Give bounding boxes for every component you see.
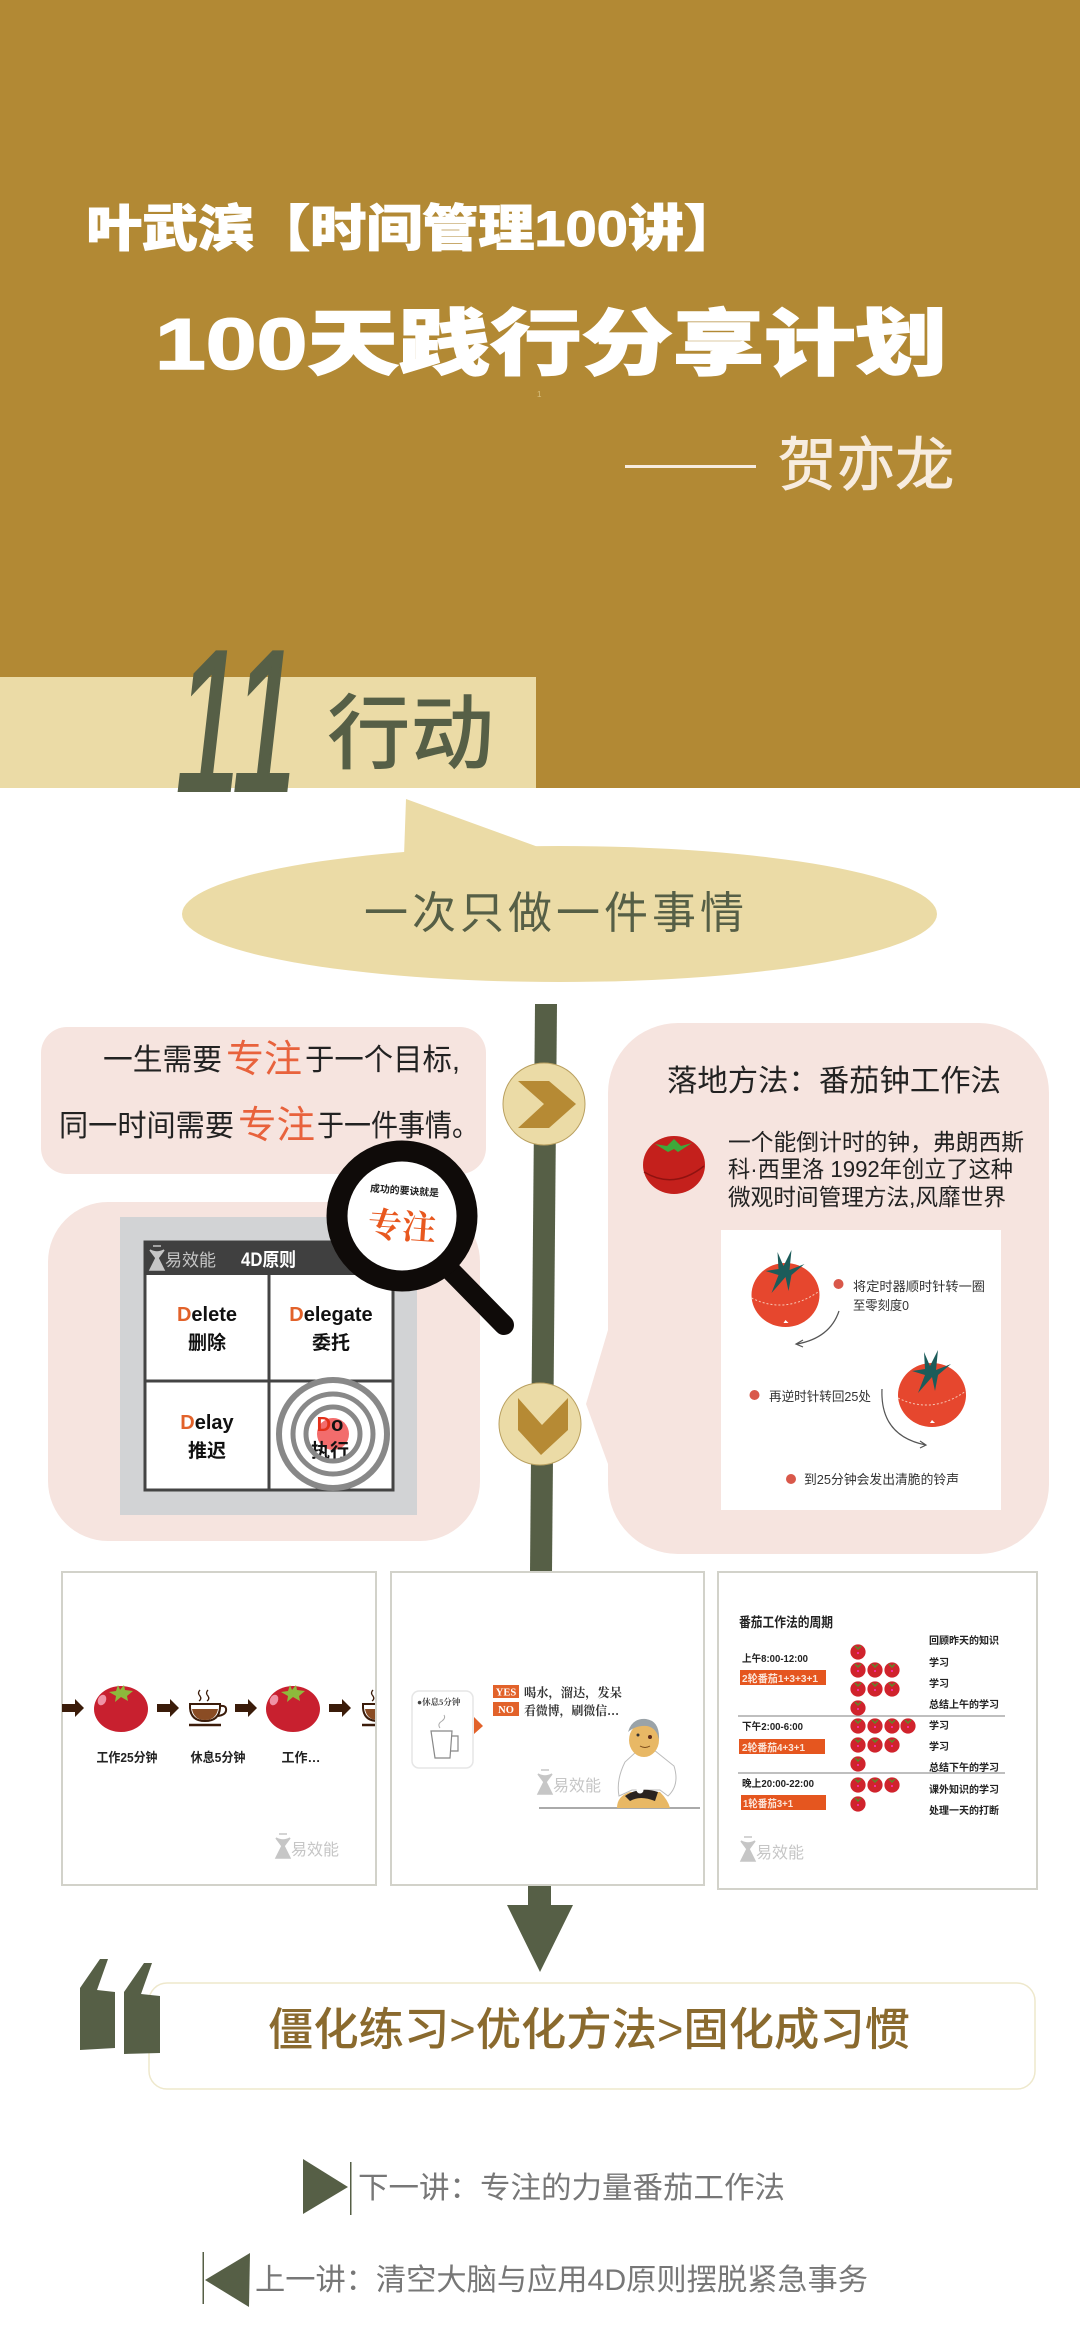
4D table: Delegate (289, 1304, 373, 1326)
previous lecture link: 上一讲：清空大脑与应用4D原则摆脱紧急事务 (255, 2264, 868, 2297)
card: what to do in a break (391, 1572, 704, 1885)
4D table: 删除 (188, 1331, 226, 1354)
card: pomodoro day schedule: 番茄工作法的周期 (739, 1614, 833, 1630)
panel: focus statement: 同一时间需要 (59, 1110, 234, 1143)
4D table: 委托 (312, 1332, 350, 1354)
card: what to do in a break: 易效能 (553, 1777, 601, 1795)
panel: pomodoro method (586, 1023, 1049, 1554)
speech bubble (182, 799, 937, 982)
card: pomodoro day schedule: 课外知识的学习 (929, 1783, 999, 1796)
icon: tomato timer (643, 1136, 705, 1194)
title: series name: 叶武滨【时间管理100讲】 (86, 201, 740, 257)
card: what to do in a break: 喝水，溜达，发呆 (524, 1685, 622, 1700)
panel: pomodoro method: 落地方法：番茄钟工作法 (667, 1065, 1001, 1098)
panel: focus statement: 一生需要 (103, 1044, 222, 1077)
conclusion box: 僵化练习>优化方法>固化成习惯 (268, 2004, 910, 2055)
card: pomodoro day schedule: 回顾昨天的知识 (929, 1634, 999, 1647)
card: pomodoro day schedule: 上午8:00-12:00 (742, 1652, 808, 1665)
title: main heading: 100天践行分享计划 (155, 305, 947, 385)
4D table: Delay (180, 1412, 235, 1434)
illustration: timer steps: 到25分钟会发出清脆的铃声 (804, 1472, 959, 1487)
panel: focus statement: 于一件事情。 (317, 1110, 479, 1143)
card: work/rest cycle: 工作… (281, 1750, 321, 1765)
4D table: Delete (177, 1304, 237, 1326)
timeline node: right chevron (503, 1063, 585, 1145)
tomato counts (850, 1644, 916, 1812)
icon: seated monk (617, 1719, 676, 1808)
conclusion box (149, 1983, 1035, 2089)
speech bubble: 一次只做一件事情 (364, 889, 744, 938)
panel: focus statement: 专注 (226, 1039, 302, 1081)
card: pomodoro day schedule: 1轮番茄3+1 (743, 1797, 793, 1810)
header background (0, 0, 1080, 788)
card: pomodoro day schedule: 处理一天的打断 (929, 1804, 999, 1817)
card: pomodoro day schedule (718, 1572, 1037, 1889)
next lecture link (303, 2159, 785, 2215)
illustration: timer steps: 至零刻度0 (853, 1298, 909, 1313)
illustration: timer steps: 将定时器顺时针转一圈 (853, 1279, 985, 1294)
4D table: Do (317, 1414, 343, 1436)
author line: 贺亦龙 (778, 433, 954, 498)
timeline bar (530, 1004, 557, 1572)
panel: focus statement: 于一个目标, (305, 1044, 460, 1077)
page mark: 1 (537, 390, 542, 399)
previous lecture link (202, 2252, 868, 2307)
card: pomodoro day schedule: 下午2:00-6:00 (742, 1720, 803, 1733)
panel: focus statement: 专注 (238, 1105, 315, 1147)
next lecture link: 下一讲：专注的力量番茄工作法 (358, 2172, 785, 2205)
illustration: timer steps: 再逆时针转回25处 (769, 1389, 871, 1404)
card: what to do in a break: ●休息5分钟 (417, 1697, 461, 1707)
section tag band: 行动 (327, 689, 494, 780)
card: pomodoro day schedule: 学习 (929, 1677, 949, 1690)
illustration: timer steps (721, 1230, 1001, 1510)
card: pomodoro day schedule: 总结上午的学习 (929, 1698, 999, 1711)
card: what to do in a break: 看微博，刷微信… (524, 1703, 619, 1718)
card: pomodoro day schedule: 2轮番茄4+3+1 (742, 1741, 805, 1754)
author line (625, 433, 954, 498)
arrow: down to conclusion (507, 1886, 573, 1972)
card: what to do in a break: YES (496, 1688, 516, 1698)
card: pomodoro day schedule: 学习 (929, 1656, 949, 1669)
4D table: 易效能 (165, 1251, 216, 1270)
section tag band (0, 610, 536, 833)
card: pomodoro day schedule: 学习 (929, 1719, 949, 1732)
panel: 4D principle (48, 1202, 480, 1541)
icon: magnifier: 专注 (367, 1206, 437, 1248)
card: pomodoro day schedule: 总结下午的学习 (929, 1761, 999, 1774)
4D table: 4D原则 (241, 1249, 296, 1271)
4D table: 推迟 (188, 1440, 226, 1462)
card: pomodoro day schedule: 晚上20:00-22:00 (742, 1777, 814, 1790)
section tag band: 11 (176, 610, 298, 833)
panel: focus statement (41, 1027, 486, 1174)
4D table (144, 1241, 393, 1490)
card: work/rest cycle: 易效能 (291, 1841, 339, 1859)
panel: pomodoro method: 科·西里洛 1992年创立了这种 (728, 1156, 1013, 1182)
icon: magnifier (337, 1151, 504, 1325)
card: work/rest cycle: 休息5分钟 (190, 1750, 246, 1765)
card: pomodoro day schedule: 学习 (929, 1740, 949, 1753)
card: pomodoro day schedule: 2轮番茄1+3+3+1 (742, 1672, 818, 1685)
card: work/rest cycle (62, 1572, 399, 1885)
panel: pomodoro method: 一个能倒计时的钟，弗朗西斯 (728, 1129, 1024, 1155)
icon: quotation marks (80, 1959, 160, 2054)
card: what to do in a break: NO (498, 1705, 514, 1716)
icon: magnifier: 成功的要诀就是 (370, 1182, 439, 1199)
4D table: 执行 (311, 1440, 349, 1462)
panel: pomodoro method: 微观时间管理方法,风靡世界 (728, 1184, 1006, 1210)
timeline node: down chevron (499, 1383, 581, 1465)
card: work/rest cycle: 工作25分钟 (96, 1750, 158, 1765)
card: pomodoro day schedule: 易效能 (756, 1844, 804, 1862)
